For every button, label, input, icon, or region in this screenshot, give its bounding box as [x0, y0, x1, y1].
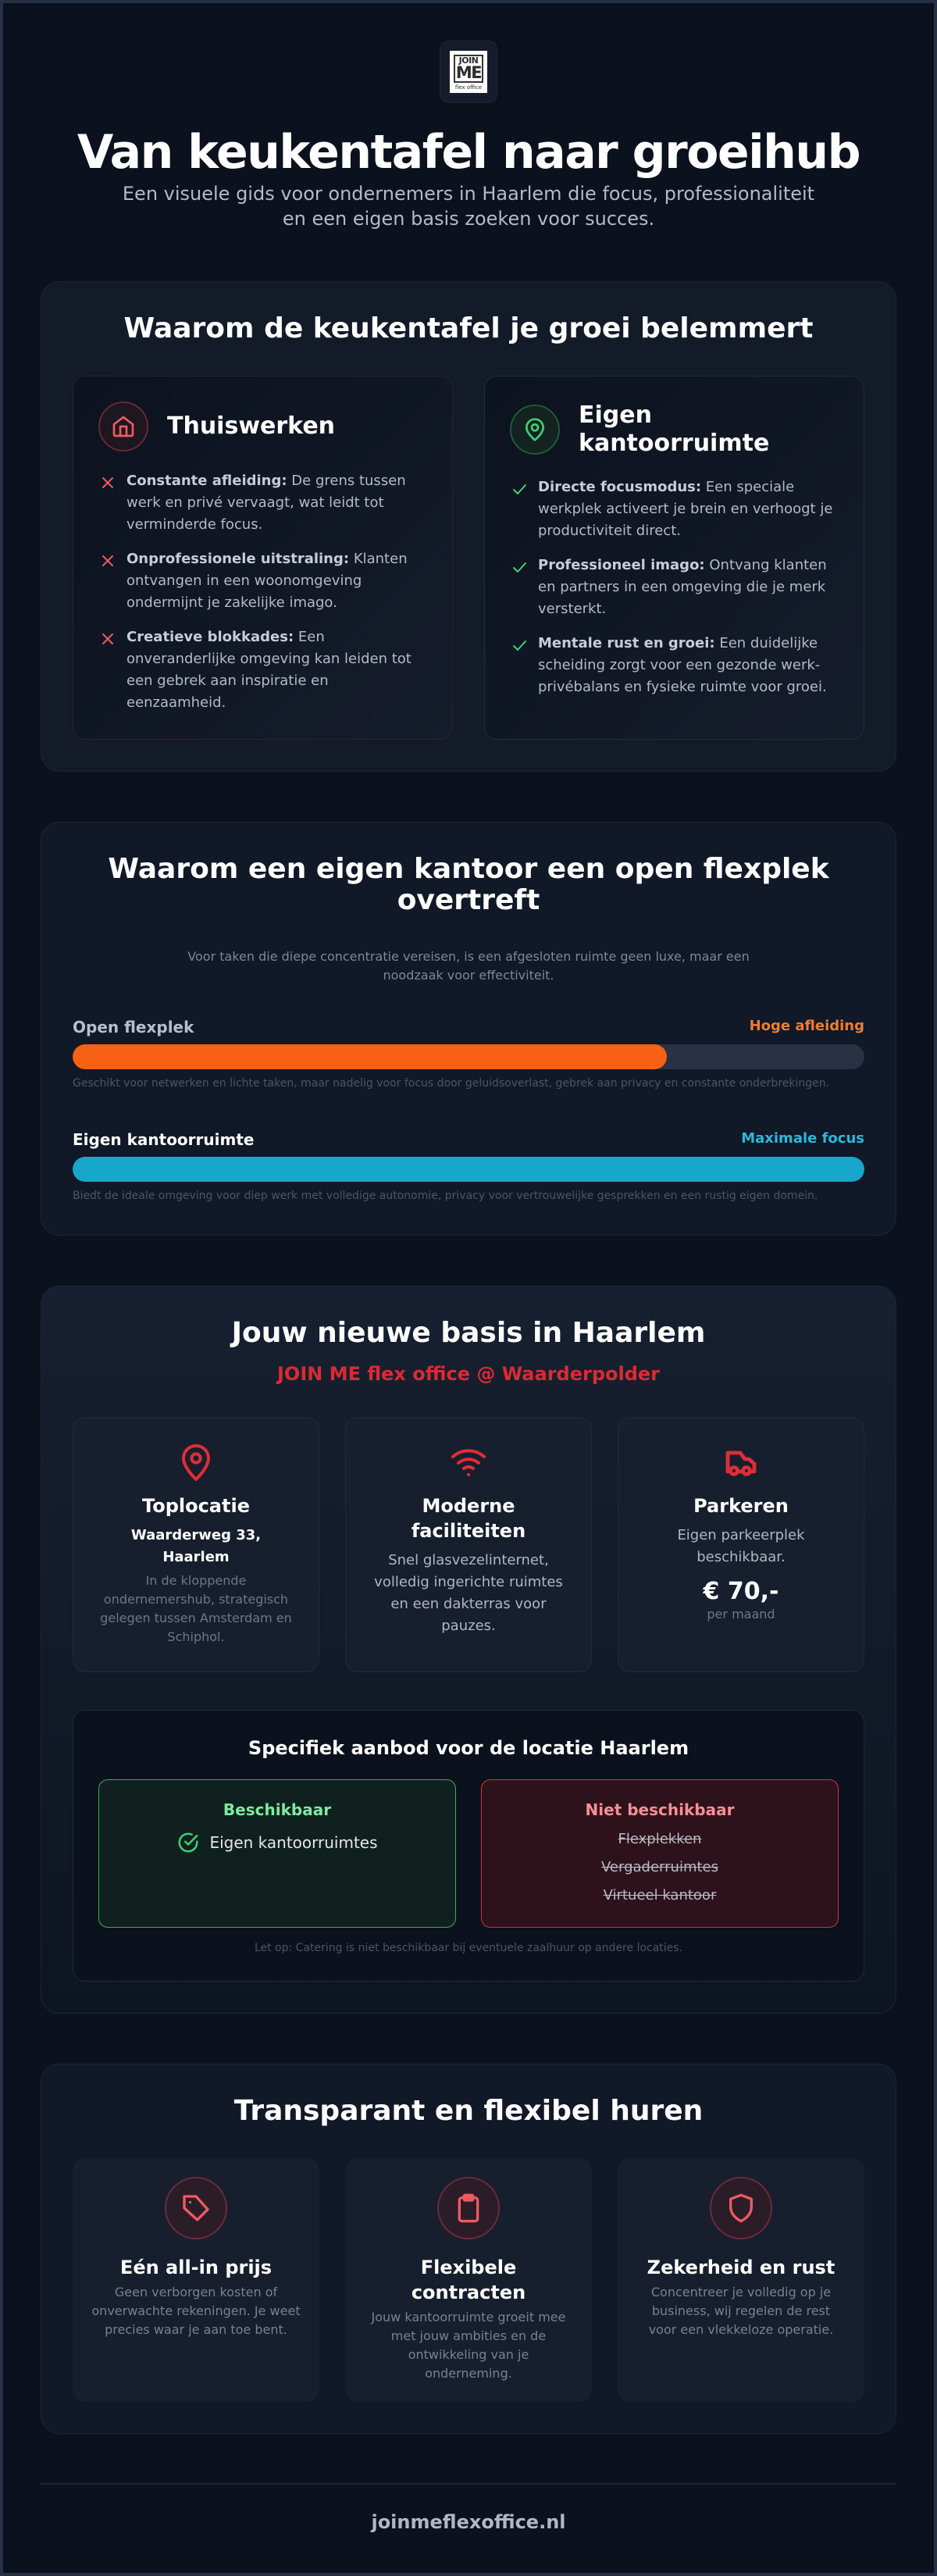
intro text: Voor taken die diepe concentratie vereisen, is een afgesloten ruimte geen luxe, maar een noodzaak voor effectiviteit. [187, 949, 750, 983]
item: directe focusmodus: Directe focusmodus: Een speciale werkplek activeert je brein en verhoogt je productiviteit direct. [538, 479, 832, 539]
heading: Transparant en flexibel huren [234, 2095, 703, 2127]
item: constante afleiding: Constante afleiding: De grens tussen werk en privé vervaagt, wat leidt tot verminderde focus. [126, 473, 406, 533]
footer url: joinmeflexoffice.nl [371, 2511, 566, 2533]
bar: open flexplek: Hoge afleiding [750, 1018, 864, 1034]
card: flexibele contracten: Flexibele contracten [411, 2257, 526, 2303]
bar: eigen kantoorruimte: Maximale focus [741, 1130, 864, 1147]
subheading: JOIN ME flex office @ Waarderpolder [277, 1363, 660, 1385]
address: Waarderweg 33, Haarlem [131, 1527, 261, 1565]
item: flexplekken: Flexplekken [618, 1831, 701, 1847]
panel: jouw nieuwe basis [41, 1286, 896, 2014]
item: mentale rust en groei: Mentale rust en groei: Een duidelijke scheiding zorgt voor een gezonde werk-privébalans en fysieke ruimte voor groei. [538, 635, 827, 695]
title: Van keukentafel naar groeihub [77, 125, 860, 180]
logo image: JOIN ME flex office: JOIN [459, 55, 478, 66]
note: Let op: Catering is niet beschikbaar bij eventuele zaalhuur op andere locaties. [255, 1942, 682, 1954]
logo [440, 41, 497, 103]
thuiswerken header: Thuiswerken [167, 412, 335, 440]
description: In de kloppende ondernemershub, strategisch gelegen tussen Amsterdam en Schiphol. [100, 1573, 292, 1644]
card: all-in prijs: Geen verborgen kosten of onverwachte rekeningen. Je weet precies waar je aan toe bent. [91, 2285, 301, 2337]
box: beschikbaar [98, 1779, 456, 1928]
card: zekerheid en rust: Zekerheid en rust [647, 2257, 835, 2278]
card: moderne faciliteiten [345, 1418, 592, 1672]
price unit: per maand [707, 1607, 775, 1622]
card: zekerheid en rust: Concentreer je volledig op je business, wij regelen de rest voor een vlekkeloze operatie. [649, 2285, 833, 2337]
subtitle: Een visuele gids voor ondernemers in Haarlem die focus, professionaliteit [123, 183, 814, 205]
eigen kantoorruimte header: Eigen kantoorruimte [579, 401, 769, 457]
niet beschikbaar label: Niet beschikbaar [586, 1800, 734, 1819]
icon: car [726, 1451, 756, 1476]
box: niet beschikbaar [481, 1779, 839, 1928]
panel: waarom de keukentafel [41, 281, 896, 772]
card: all-in prijs [73, 2158, 319, 2402]
item: onprofessionele uitstraling: Onprofessionele uitstraling: Klanten ontvangen in een woonomgeving ondermijnt je zakelijke imago. [126, 551, 408, 611]
benefit cards [91, 2177, 835, 2381]
logo image: JOIN ME flex office [450, 51, 487, 93]
item: eigen kantoorruimtes: Eigen kantoorruimtes [209, 1833, 378, 1852]
description: Snel glasvezelinternet, volledig ingerichte ruimtes en een dakterras voor pauzes. [374, 1552, 563, 1634]
heading: Waarom de keukentafel je groei belemmert [124, 312, 813, 344]
panel: specifiek aanbod [73, 1710, 864, 1982]
icon: tag [165, 2177, 227, 2239]
card: toplocatie [73, 1418, 319, 1672]
availability boxes [98, 1779, 839, 1928]
bar: open flexplek: Geschikt voor netwerken en lichte taken, maar nadelig voor focus door geluidsoverlast, gebrek aan privacy en constante onderbrekingen. [73, 1077, 829, 1090]
item: vergaderruimtes: Vergaderruimtes [601, 1859, 718, 1875]
item: professioneel imago: Professioneel imago: Ontvang klanten en partners in een omgeving die je merk versterkt. [538, 557, 827, 617]
icon: wifi [451, 1449, 486, 1476]
bar: open flexplek [73, 1018, 864, 1090]
bar: eigen kantoorruimte: Eigen kantoorruimte [73, 1130, 254, 1149]
panel: open flexplek vergelijking [41, 822, 896, 1236]
card: parkeren: Parkeren [693, 1495, 789, 1517]
item: creatieve blokkades: Creatieve blokkades: Een onveranderlijke omgeving kan leiden tot een gebrek aan inspiratie en eenzaamheid. [126, 629, 411, 711]
card: zekerheid en rust [618, 2158, 864, 2402]
bar: eigen kantoorruimte: Biedt de ideale omgeving voor diep werk met volledige autonomie, privacy voor vertrouwelijke gesprekken en een rustig eigen domein. [73, 1190, 818, 1202]
beschikbaar label: Beschikbaar [223, 1800, 331, 1819]
eigen kantoorruimte list [513, 479, 832, 695]
feature cards [73, 1418, 864, 1672]
icon: shield [710, 2177, 772, 2239]
card: all-in prijs: Eén all-in prijs [120, 2257, 272, 2278]
panel: transparant en flexibel [41, 2064, 896, 2434]
panel: eigen kantoorruimte [484, 376, 864, 740]
icon: home [98, 401, 148, 451]
bar: open flexplek: Open flexplek [73, 1018, 194, 1036]
comparison columns [73, 376, 864, 740]
card: moderne faciliteiten: Moderne faciliteiten [411, 1495, 526, 1542]
card: toplocatie: Toplocatie [142, 1495, 250, 1517]
panel: thuiswerken [73, 376, 453, 740]
logo image: JOIN ME flex office: flex office [455, 84, 482, 91]
logo image: JOIN ME flex office: ME [456, 63, 481, 82]
icon: map pin [510, 405, 560, 455]
card: flexibele contracten: Jouw kantoorruimte groeit mee met jouw ambities en de ontwikkeling van je onderneming. [372, 2310, 565, 2381]
icon: clipboard [437, 2177, 500, 2239]
heading: Waarom een eigen kantoor een open flexplek overtreft [108, 853, 829, 916]
price: € 70,- [704, 1578, 778, 1605]
icon: location pin [182, 1444, 210, 1481]
thuiswerken list [102, 473, 411, 711]
subtitle: en een eigen basis zoeken voor succes. [283, 208, 654, 230]
aanbod heading: Specifiek aanbod voor de locatie Haarlem [248, 1737, 689, 1759]
subtitle [123, 183, 814, 230]
bar: eigen kantoorruimte [73, 1130, 864, 1202]
card: parkeren [618, 1418, 864, 1672]
heading: Jouw nieuwe basis in Haarlem [232, 1317, 705, 1349]
card: flexibele contracten [345, 2158, 592, 2402]
item: virtueel kantoor: Virtueel kantoor [604, 1887, 716, 1903]
thuiswerken header [98, 401, 335, 451]
description: Eigen parkeerplek beschikbaar. [677, 1527, 805, 1565]
